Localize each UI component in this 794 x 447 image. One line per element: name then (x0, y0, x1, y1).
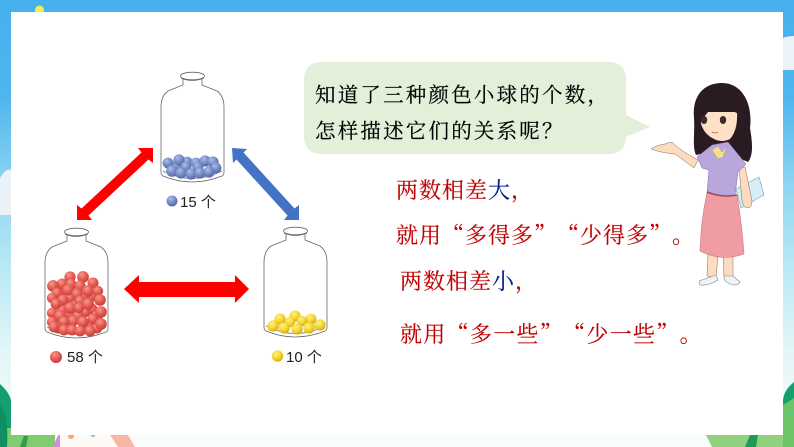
fringe (696, 92, 749, 125)
shoes (699, 275, 740, 285)
arrow: red double arrow between blue jar and red jar (77, 148, 153, 220)
decorative yellow sun dot (35, 6, 44, 14)
face (700, 112, 737, 141)
background: left cloud (0, 170, 11, 215)
text: 多得多 少得多: 就用“多得多”“少得多”。 (396, 219, 694, 250)
skirt (700, 193, 744, 257)
text: 两数相差小: 两数相差小， (400, 265, 538, 296)
jar: blue balls (15) (161, 72, 224, 182)
background: right plants (706, 382, 794, 447)
bubble text: 知道了三种颜色小球的个数， (315, 78, 610, 108)
background: bottom strip (0, 430, 794, 447)
jar: yellow balls (10) (264, 227, 327, 337)
background: rainbow (54, 433, 135, 447)
legs (707, 254, 733, 278)
waistband (707, 192, 737, 196)
right arm (739, 167, 752, 208)
label: 58 个: 58 个 (67, 349, 103, 366)
mouth (712, 132, 718, 133)
teacher illustration (651, 83, 764, 285)
left arm (651, 142, 698, 168)
bubble text: 怎样描述它们的关系呢？ (315, 114, 565, 144)
label: 10 个: 10 个 (286, 349, 322, 366)
label: 15 个: 15 个 (180, 194, 216, 211)
collar bow (712, 145, 727, 159)
arrow: blue double arrow between blue jar and yellow jar (232, 148, 299, 220)
arrow: red double arrow between red jar and yellow jar (124, 275, 249, 303)
bubble text (315, 78, 610, 144)
blouse (697, 142, 746, 196)
jar: red balls (58) (45, 228, 108, 338)
background: right cloud (783, 36, 794, 70)
eyes (701, 116, 707, 124)
text: 两数相差大: 两数相差大， (396, 174, 534, 205)
background: left plants (0, 384, 55, 447)
book (736, 177, 764, 208)
speech bubble (304, 62, 650, 154)
text: 多一些 少一些: 就用“多一些”“少一些”。 (400, 318, 702, 349)
label: 58 个 (50, 349, 103, 366)
hair back (694, 83, 752, 162)
